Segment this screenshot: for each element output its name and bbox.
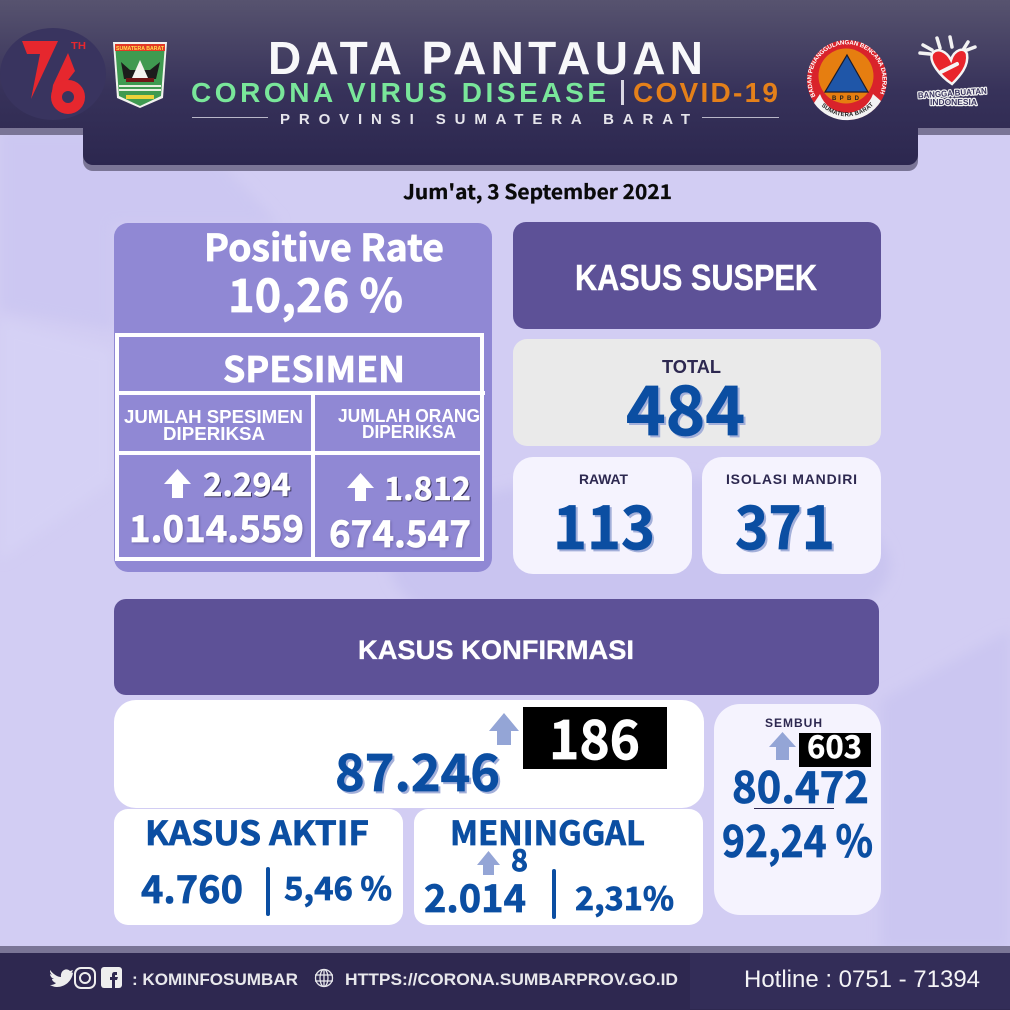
panel: sembuh — [714, 704, 881, 915]
logo: 76th anniversary: TH — [71, 41, 86, 52]
logo: Bangga Buatan Indonesia: BANGGA BUATAN — [918, 86, 987, 100]
panel: rawat: 113 — [553, 480, 655, 567]
logo: Sumatera Barat shield: SUMATERA BARAT — [116, 46, 164, 52]
subtitle: Corona Virus Disease: CORONA VIRUS DISEASE — [191, 77, 606, 108]
panel: kasus konfirmasi heading: KASUS KONFIRMASI — [358, 635, 634, 665]
heading: Spesimen: SPESIMEN — [223, 342, 405, 393]
icon: twitter — [50, 969, 73, 987]
date: Jum'at, 3 September 2021 — [403, 176, 672, 205]
footer bar — [0, 946, 1010, 1010]
label: jumlah spesimen diperiksa — [124, 407, 303, 444]
total spesimen: 1.014.559 — [129, 499, 304, 553]
heading: Positive Rate: Positive Rate — [204, 218, 444, 272]
panel: meninggal: MENINGGAL — [450, 807, 645, 855]
panel: kasus aktif: KASUS AKTIF — [145, 807, 369, 855]
logo: BPBD: SUMATERA BARAT — [822, 102, 872, 116]
arrow up: spesimen — [164, 469, 191, 498]
panel: isolasi mandiri: ISOLASI MANDIRI — [726, 471, 857, 487]
subtitle: province: PROVINSI SUMATERA BARAT — [280, 111, 690, 128]
panel: rawat: RAWAT — [579, 471, 628, 487]
divider bar — [621, 80, 624, 105]
panel: sembuh: SEMBUH — [765, 716, 822, 730]
panel: isolasi mandiri: 371 — [735, 480, 835, 567]
panel: kasus suspek heading — [513, 222, 881, 329]
logo: Sumatera Barat shield — [113, 42, 167, 108]
panel: positive rate and spesimen — [114, 218, 492, 572]
label: jumlah spesimen diperiksa: JUMLAH SPESIMEN — [124, 407, 303, 427]
logo: 76th anniversary — [0, 28, 106, 120]
logo: Bangga Buatan Indonesia: INDONESIA — [930, 97, 977, 107]
footer: hotline: Hotline : 0751 - 71394 — [744, 966, 980, 993]
panel: kasus aktif — [114, 807, 403, 925]
panel: kasus aktif: 4.760 — [141, 859, 243, 914]
label: jumlah orang diperiksa: JUMLAH ORANG — [338, 406, 480, 426]
table grid — [117, 335, 485, 559]
arrow up: meninggal — [477, 851, 500, 875]
label: jumlah orang diperiksa — [338, 406, 480, 442]
logo: Bangga Buatan Indonesia — [918, 37, 987, 107]
panel: kasus konfirmasi heading — [114, 599, 879, 695]
icon: instagram — [75, 968, 95, 988]
panel: suspek total — [513, 339, 881, 455]
panel: sembuh: 92,24 % — [722, 806, 873, 870]
panel: sembuh: 80.472 — [732, 752, 869, 816]
daily konfirmasi badge — [523, 696, 667, 775]
panel: meninggal: 2,31% — [575, 874, 674, 920]
panel: suspek total: 484 — [626, 356, 745, 455]
total orang: 674.547 — [329, 504, 471, 558]
footer: website: HTTPS://CORONA.SUMBARPROV.GO.ID — [345, 970, 678, 989]
subtitle: COVID-19: COVID-19 — [633, 77, 778, 108]
panel: meninggal: 2.014 — [424, 868, 526, 923]
panel: isolasi mandiri — [702, 457, 881, 574]
daily sembuh badge: 603 — [807, 722, 862, 767]
panel: rawat — [513, 457, 692, 574]
logo: BPBD: BPBD — [832, 96, 860, 102]
daily orang: 1.812 — [384, 464, 471, 510]
label: jumlah spesimen diperiksa: DIPERIKSA — [163, 424, 265, 444]
arrow up: sembuh — [769, 732, 796, 760]
panel: suspek total: TOTAL — [662, 357, 721, 377]
panel: meninggal: 8 — [511, 836, 528, 880]
footer: social handle: : KOMINFOSUMBAR — [132, 970, 298, 989]
panel: kasus suspek heading: KASUS SUSPEK — [575, 257, 817, 298]
icon: globe — [315, 969, 333, 987]
arrow up: konfirmasi — [489, 713, 519, 745]
panel: kasus aktif: 5,46 % — [284, 864, 392, 910]
icon: facebook — [101, 967, 122, 988]
label: jumlah orang diperiksa: DIPERIKSA — [362, 422, 456, 442]
daily spesimen: 2.294 — [203, 460, 291, 506]
daily konfirmasi badge: 186 — [549, 696, 640, 775]
total konfirmasi value: 87.246 — [335, 732, 500, 806]
panel: total konfirmasi — [114, 696, 704, 808]
value: positive rate percent: 10,26 % — [228, 260, 403, 326]
logo: BPBD: BADAN PENANGGULANGAN BENCANA DAERAH — [807, 40, 887, 98]
title: Data Pantauan: DATA PANTAUAN — [268, 32, 703, 84]
panel: meninggal — [414, 807, 703, 925]
arrow up: orang — [347, 473, 374, 501]
header band — [0, 0, 1010, 171]
